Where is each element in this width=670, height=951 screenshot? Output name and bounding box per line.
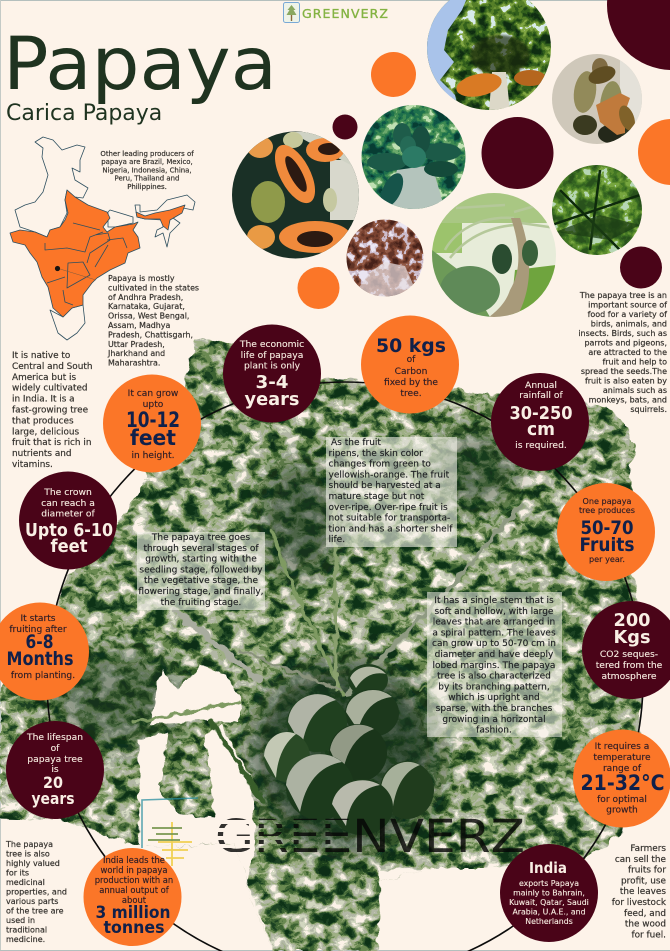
- stat: 200 kgs CO2: [582, 601, 670, 699]
- text: states: Papaya is mostly: [108, 274, 175, 283]
- text: other producers: Nigeria, Indonesia, China,: [102, 166, 192, 174]
- text: food source: monkeys, bats, and: [589, 396, 667, 404]
- text: food source: insects. Birds, such as: [578, 329, 667, 338]
- text box: ripening: mature stage but not: [328, 492, 425, 502]
- stat: 10-12 feet: 10-12: [126, 408, 180, 432]
- stat: 50 kgs carbon: 50 kgs: [376, 335, 446, 357]
- text box: single stem: soft and hollow, with large: [435, 607, 554, 617]
- large ring: [47, 382, 643, 951]
- text box: ripening: ripens, the skin color: [328, 449, 423, 459]
- stat: temperature: range of: [603, 764, 642, 774]
- stat: 3-4 years: plant is only: [244, 360, 301, 372]
- map of India: [10, 137, 195, 340]
- text: states: cultivated in the states: [108, 283, 199, 292]
- text: farmers: for livestock: [612, 898, 667, 908]
- stat: 50-70 fruits: per year.: [589, 554, 625, 564]
- text: states: of Andhra Pradesh,: [108, 293, 183, 302]
- text box: ripening: over-ripe. Over-ripe fruit is: [328, 503, 448, 513]
- stat: 50-70 fruits: 50-70: [580, 517, 634, 539]
- stat: 10-12 feet: feet: [130, 426, 176, 450]
- stat: temperature: temperature: [593, 753, 651, 763]
- stat: India production: 3 million: [96, 903, 170, 923]
- stat: lifespan: 20: [43, 773, 63, 792]
- text: food source: parrots and pigeons,: [584, 338, 667, 348]
- text box: single stem: lobed margins. The papaya: [433, 661, 555, 671]
- stat: India exports: Arabia, U.A.E., and: [512, 908, 586, 916]
- text: food source: important source of: [588, 300, 667, 310]
- text: native range: fast-growing tree: [12, 406, 88, 416]
- text box: stages of growth: the vegetative stage, the: [144, 576, 258, 586]
- stat: India exports: Netherlands: [525, 917, 573, 926]
- stat: 200 kgs CO2: atmosphere: [601, 671, 657, 682]
- text: medicinal: for its: [6, 868, 29, 878]
- text: food source: are attracted to the: [588, 348, 667, 357]
- text box: stages of growth: through several stages of: [143, 544, 259, 554]
- text: farmers: the leaves: [620, 887, 666, 897]
- stat: lifespan: [6, 721, 104, 819]
- stat: fruiting time: from planting.: [11, 671, 75, 681]
- stat: fruiting time: 6-8: [26, 631, 54, 653]
- text: medicinal: of the tree are: [6, 906, 64, 916]
- text: states: Orissa, West Bengal,: [108, 312, 189, 321]
- text: states: Uttar Pradesh,: [108, 340, 165, 349]
- text: food source: birds, animals, and: [591, 320, 667, 328]
- photo: bird on fruit: [552, 54, 642, 144]
- text: food source: squirrels.: [630, 405, 667, 414]
- stat: 50 kgs carbon: Carbon: [395, 367, 427, 377]
- subtitle: Carica Papaya: [6, 101, 162, 126]
- text: medicinal: medicinal: [6, 878, 45, 887]
- stat: temperature: It requires a: [595, 742, 649, 752]
- text box: single stem: diameter and have deeply: [435, 650, 554, 660]
- stat: India exports: [500, 844, 598, 942]
- stat: 50 kgs carbon: tree.: [400, 389, 422, 399]
- text box: single stem: leaves that are arranged in: [433, 618, 555, 628]
- logo: GREENVERZ: [302, 6, 388, 21]
- text: other producers: Peru, Thailand and: [115, 175, 179, 183]
- stat: India production: India leads the: [103, 855, 165, 865]
- text: farmers: feed, and: [624, 909, 666, 919]
- stat: crown diameter: can reach a: [41, 498, 95, 509]
- text box: single stem: a spiral pattern. The leaves: [432, 628, 556, 638]
- stat: lifespan: is: [51, 764, 59, 775]
- stat: India production: about: [122, 895, 147, 905]
- text: farmers: fruits for: [628, 866, 666, 876]
- text: food source: The papaya tree is an: [579, 291, 667, 300]
- stat: 200 kgs CO2: 200: [614, 610, 650, 631]
- text: native range: that produces: [12, 416, 74, 426]
- foliage illustration: [0, 320, 670, 951]
- text box: ripening: should be harvested at a: [328, 481, 441, 491]
- photo: brown leaves: [346, 219, 424, 300]
- text box: single stem: It has a single stem that is: [434, 596, 554, 606]
- stat: 50-70 fruits: One papaya: [582, 496, 632, 506]
- stat: lifespan: The lifespan: [26, 732, 83, 743]
- watermark logo: [142, 798, 198, 866]
- text box: stages of growth: flowering stage, and finally,: [138, 587, 264, 597]
- text box: stages of growth: The papaya tree goes: [151, 533, 250, 543]
- text: other producers: papaya are Brazil, Mexico,: [101, 158, 193, 166]
- photo: leaves from below: [552, 165, 642, 255]
- text box: single stem: can grow up to 50-70 cm in: [432, 639, 556, 649]
- stat: crown diameter: diameter of: [41, 508, 95, 520]
- stat: rainfall: [491, 373, 589, 471]
- text: states: Pradesh, Chattisgarh,: [108, 330, 193, 339]
- text: food source: fruit is also eaten by: [585, 376, 667, 386]
- stat: 3-4 years: [223, 324, 321, 422]
- stat: India production: [84, 848, 182, 946]
- text box: stages of growth: seedling stage, followed by: [139, 565, 263, 575]
- text: medicinal: properties, and: [6, 888, 67, 896]
- stat: fruiting time: It starts: [20, 614, 56, 624]
- text box: ripening: life.: [328, 535, 345, 545]
- papaya fruit cluster: [264, 664, 434, 835]
- stat: 10-12 feet: upto: [143, 400, 164, 410]
- stat: 3-4 years: The economic: [239, 339, 304, 350]
- text box: ripening: not suitable for transporta-: [328, 514, 450, 524]
- text: native range: fruit that is rich in: [12, 438, 91, 448]
- text: medicinal: various parts: [6, 897, 58, 906]
- stat: 3-4 years: 3-4: [256, 372, 288, 393]
- stat: 50 kgs carbon: fixed by the: [384, 378, 438, 388]
- text: native range: vitamins.: [12, 460, 53, 470]
- text: other producers: Philippines.: [127, 183, 167, 191]
- text: native range: It is native to: [12, 351, 70, 361]
- stat: rainfall: cm: [527, 419, 555, 440]
- text: medicinal: The papaya: [5, 840, 53, 849]
- decorative dots: [298, 0, 670, 309]
- stat: fruiting time: Months: [6, 648, 74, 670]
- text: medicinal: used in: [6, 916, 35, 925]
- stat: fruiting time: [0, 602, 89, 700]
- stat: crown diameter: Upto 6-10: [25, 520, 113, 541]
- stat: 3-4 years: years: [244, 389, 300, 410]
- stat: 200 kgs CO2: Kgs: [614, 627, 650, 648]
- text: native range: America but is: [12, 373, 76, 383]
- text: farmers: profit, use: [621, 876, 666, 886]
- stat: India exports: Kuwait, Qatar, Saudi: [509, 898, 589, 907]
- text box: stages of growth: the fruiting stage.: [161, 598, 241, 608]
- stat: temperature: [573, 730, 670, 828]
- text box: stages of growth: growth, starting with the: [145, 555, 257, 565]
- text box: ripening: [326, 437, 457, 547]
- photo: cut papayas: [232, 131, 360, 259]
- text: food source: animals such as: [603, 386, 667, 395]
- stat: 200 kgs CO2: tered from the: [596, 660, 663, 671]
- stat: India production: production with an: [95, 875, 173, 885]
- stat: India exports: exports Papaya: [519, 879, 579, 888]
- stat: rainfall: 30-250: [510, 403, 572, 424]
- text: medicinal: tree is also: [6, 850, 50, 858]
- text box: stages of growth: [137, 532, 265, 610]
- stat: rainfall: is required.: [515, 440, 567, 451]
- stat: temperature: for optimal: [597, 795, 647, 805]
- text: native range: in India. It is a: [12, 395, 75, 405]
- text box: single stem: which is upright and: [448, 693, 540, 703]
- stat: lifespan: of: [51, 743, 60, 754]
- stat: fruiting time: fruiting after: [9, 625, 67, 635]
- stat: crown diameter: feet: [50, 536, 88, 557]
- text: other producers: Other leading producers of: [100, 150, 194, 158]
- text: native range: Central and South: [12, 362, 92, 372]
- stat: 50 kgs carbon: of: [407, 355, 416, 365]
- stat: crown diameter: [19, 472, 117, 570]
- stat: 10-12 feet: It can grow: [128, 389, 179, 399]
- stat: 50-70 fruits: Fruits: [580, 534, 634, 556]
- text: farmers: the wood: [625, 920, 666, 930]
- stat: 50-70 fruits: [557, 483, 655, 581]
- photo: fruit crown: [361, 105, 466, 210]
- text box: single stem: tree is also characterized: [437, 672, 551, 682]
- text: states: Assam, Madhya: [108, 321, 170, 330]
- photo: papaya tree with fruit: [432, 193, 556, 318]
- text: native range: widely cultivated: [12, 384, 88, 394]
- text: farmers: Farmers: [630, 844, 666, 854]
- text: food source: spread the seeds.The: [581, 367, 667, 376]
- text: native range: nutrients and: [12, 449, 72, 459]
- text box: ripening: tion and has a shorter shelf: [328, 524, 453, 534]
- text: states: Jharkhand and: [107, 349, 165, 358]
- text: farmers: for fuel.: [631, 930, 666, 940]
- text: medicinal: traditional: [6, 926, 47, 934]
- text: food source: food for a variety of: [588, 310, 667, 319]
- title: Papaya: [3, 22, 277, 107]
- text: states: Karnataka, Gujarat,: [108, 302, 185, 311]
- stat: India production: world in papaya: [100, 865, 168, 875]
- stat: rainfall: rainfall of: [519, 390, 564, 401]
- stat: 50 kgs carbon: [361, 316, 459, 414]
- stat: lifespan: papaya tree: [27, 754, 83, 765]
- logo: [284, 2, 388, 22]
- text box: ripening: changes from green to: [328, 460, 431, 470]
- stat: India production: annual output of: [99, 885, 170, 895]
- text box: single stem: by its branching pattern,: [438, 682, 550, 692]
- stat: temperature: growth: [606, 806, 638, 816]
- photo: tree from below: [427, 0, 551, 115]
- stat: 50-70 fruits: tree produces: [579, 505, 635, 515]
- text box: single stem: sparse, with the branches: [436, 704, 553, 714]
- text box: single stem: growing in a horizontal: [442, 715, 546, 725]
- stat: lifespan: years: [32, 789, 74, 808]
- stat: 200 kgs CO2: CO2 seques-: [600, 649, 658, 660]
- stat: India exports: mainly to Bahrain,: [513, 888, 585, 898]
- text: states: Maharashtra.: [108, 359, 160, 368]
- stat: rainfall: Annual: [525, 380, 557, 391]
- stat: 10-12 feet: [103, 374, 201, 472]
- text: medicinal: medicine.: [6, 935, 45, 944]
- text: native range: large, delicious: [12, 427, 80, 437]
- text box: ripening: As the fruit: [331, 438, 381, 448]
- text: medicinal: highly valued: [6, 859, 60, 868]
- text box: ripening: yellowish-orange. The fruit: [328, 470, 450, 480]
- watermark text: GREE NVERZ: [215, 810, 525, 863]
- text: food source: fruit and help to: [602, 358, 667, 366]
- stat: 10-12 feet: in height.: [131, 451, 175, 461]
- stat: crown diameter: The crown: [43, 487, 92, 498]
- text box: single stem: fashion.: [476, 726, 512, 736]
- text box: single stem: [427, 592, 562, 737]
- stat: 3-4 years: life of papaya: [241, 350, 303, 361]
- stat: India production: tonnes: [104, 918, 164, 938]
- text: farmers: can sell the: [615, 855, 666, 865]
- stat: India exports: India: [529, 859, 567, 877]
